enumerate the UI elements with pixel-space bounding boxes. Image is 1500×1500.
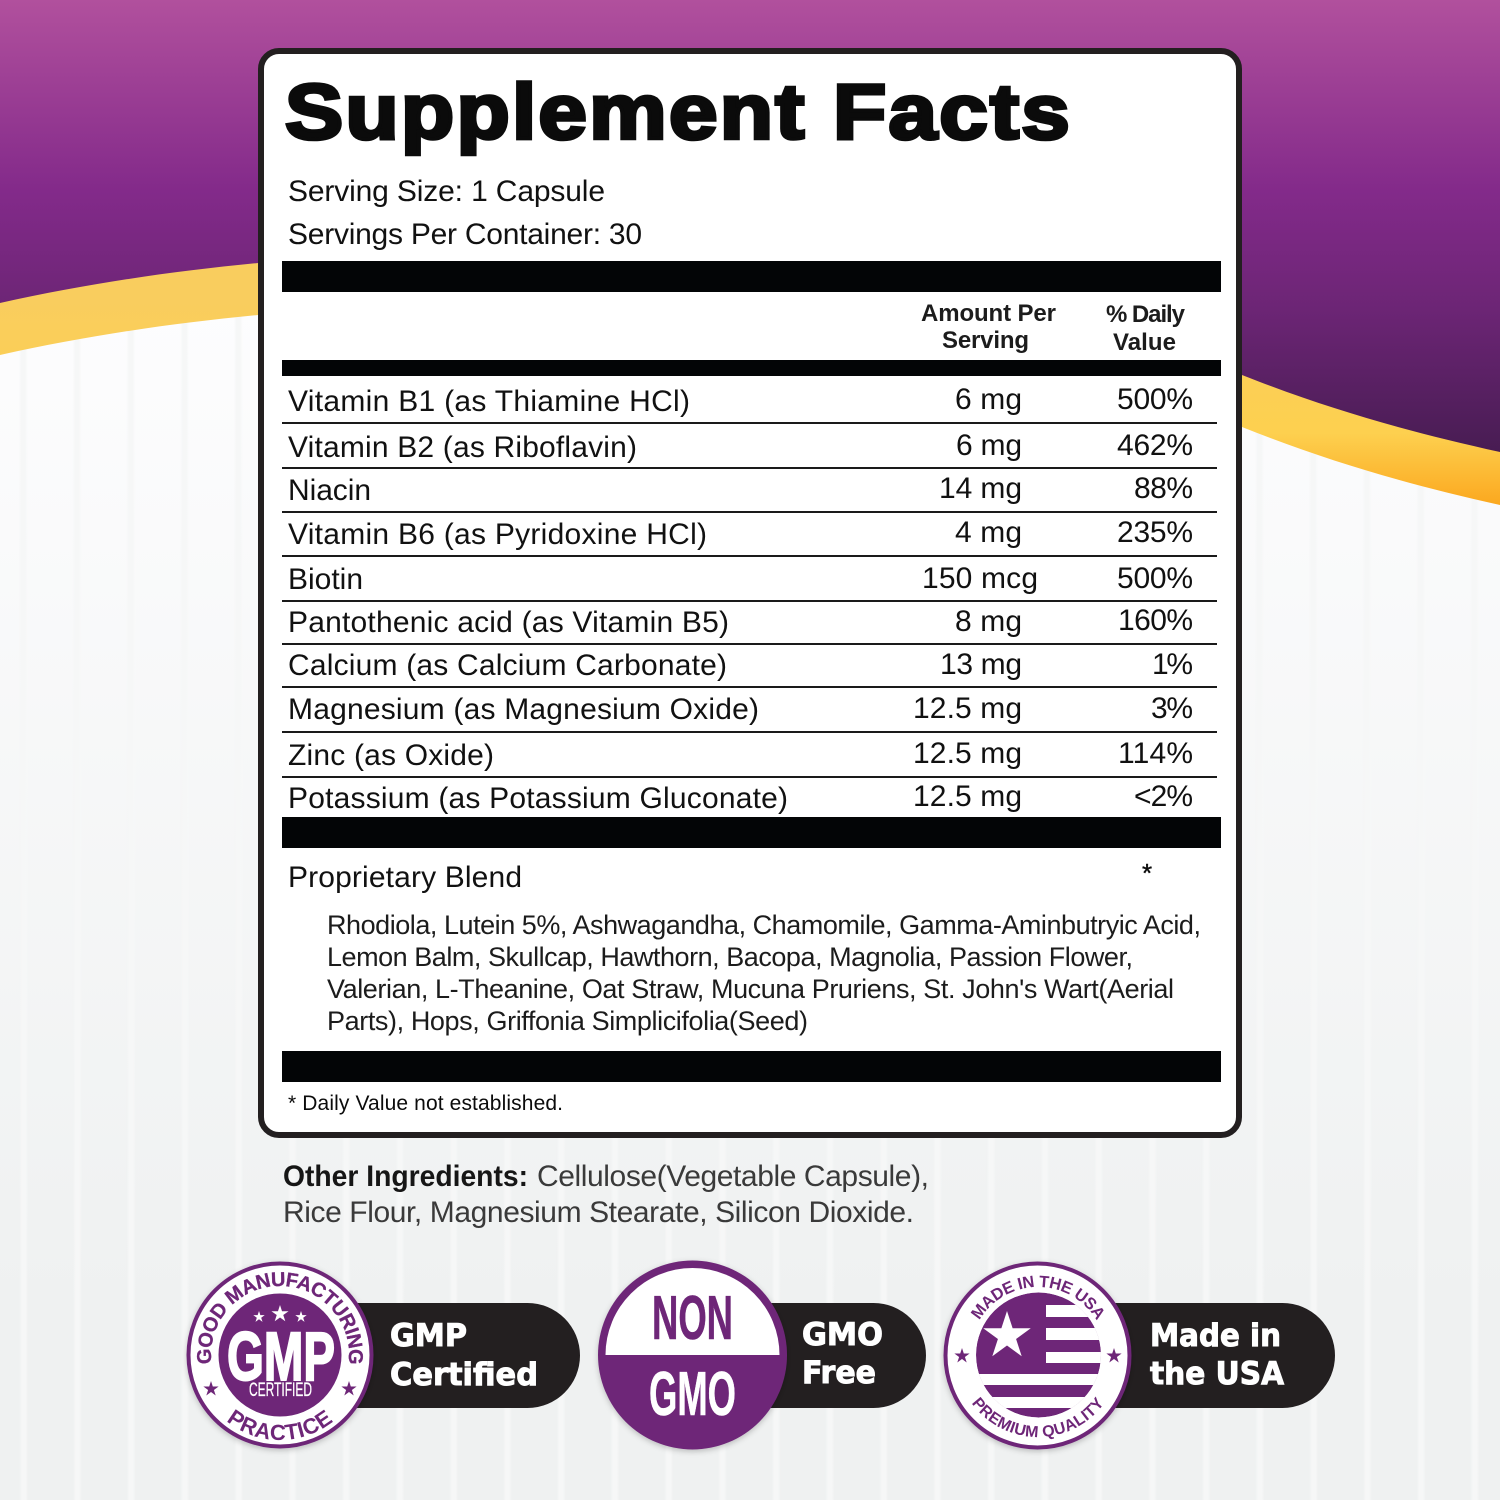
row: potassium: <2% — [1134, 780, 1193, 813]
panel: supplement facts label — [261, 51, 1239, 1135]
row: vitamin b2: Vitamin B2 (as Riboflavin) — [288, 431, 637, 464]
icon: USA seal: PREMIUM QUALITY — [972, 1396, 1102, 1440]
proprietary blend heading — [288, 858, 1152, 894]
title: Supplement Facts — [285, 68, 1072, 156]
row: niacin: 88% — [1134, 472, 1193, 505]
proprietary blend heading: Proprietary Blend — [288, 861, 522, 894]
column header: percent daily value: Value — [1113, 329, 1176, 356]
row: magnesium: 12.5 mg — [913, 692, 1022, 725]
pill: GMO free: GMO — [802, 1317, 883, 1353]
row: pantothenic acid — [288, 604, 1193, 639]
column header: amount per serving: Amount Per — [921, 300, 1056, 327]
row: zinc: Zinc (as Oxide) — [288, 739, 494, 772]
purple header background — [0, 0, 1500, 452]
row: vitamin b1 — [288, 383, 1193, 418]
row: potassium: Potassium (as Potassium Gluconate) — [288, 782, 788, 815]
row: vitamin b6: Vitamin B6 (as Pyridoxine HCl) — [288, 518, 707, 551]
row: magnesium: 3% — [1151, 692, 1193, 725]
row: vitamin b2: 6 mg — [956, 429, 1022, 462]
row: biotin: 150 mcg — [922, 562, 1038, 595]
row: zinc: 12.5 mg — [913, 737, 1022, 770]
badge: GMP certified — [184, 1260, 580, 1454]
row: vitamin b6 — [288, 516, 1193, 551]
row: vitamin b1: 6 mg — [955, 383, 1022, 416]
row: calcium: 13 mg — [940, 648, 1022, 681]
row: pantothenic acid: 8 mg — [955, 605, 1022, 638]
row: magnesium: Magnesium (as Magnesium Oxide) — [288, 693, 759, 726]
nutrient row separators — [282, 422, 1217, 778]
row: vitamin b6: 235% — [1117, 516, 1193, 549]
row: niacin: 14 mg — [939, 472, 1022, 505]
proprietary blend ingredients: Rhodiola, Lutein 5%, Ashwagandha, Chamomile, Gamma-Aminbutryic Acid, — [327, 910, 1201, 940]
column header: amount per serving: Serving — [942, 327, 1029, 354]
pill: GMO free — [700, 1303, 926, 1408]
pill: GMO free: Free — [802, 1355, 876, 1391]
proprietary blend heading: * — [1142, 858, 1152, 888]
icon: GMP seal: GMP — [227, 1318, 335, 1395]
serving information: Serving Size: 1 Capsule — [288, 175, 605, 208]
row: calcium: Calcium (as Calcium Carbonate) — [288, 649, 727, 682]
icon: USA seal: MADE IN THE USA — [970, 1276, 1104, 1320]
proprietary blend ingredients — [327, 910, 1201, 1036]
yellow wave band — [0, 250, 1500, 505]
row: magnesium — [288, 692, 1193, 726]
icon: GMP seal — [184, 1260, 374, 1454]
row: niacin — [288, 472, 1193, 507]
serving information — [288, 175, 642, 251]
serving information: Servings Per Container: 30 — [288, 218, 642, 251]
row: vitamin b1: 500% — [1117, 383, 1193, 416]
row: pantothenic acid: Pantothenic acid (as Vitamin B5) — [288, 606, 729, 639]
row: zinc — [288, 737, 1193, 772]
footnote: * Daily Value not established. — [288, 1092, 563, 1115]
icon: non GMO seal: NON — [652, 1284, 733, 1353]
other ingredients: Cellulose(Vegetable Capsule), — [537, 1160, 929, 1193]
icon: USA seal — [940, 1260, 1132, 1454]
column header: percent daily value — [1106, 301, 1186, 356]
pill: made in the USA: the USA — [1150, 1356, 1284, 1392]
icon: GMP seal: CERTIFIED — [249, 1380, 312, 1401]
nutrient table — [288, 383, 1193, 815]
row: vitamin b6: 4 mg — [955, 516, 1022, 549]
row: potassium: 12.5 mg — [913, 780, 1022, 813]
row: vitamin b2: 462% — [1117, 429, 1193, 462]
pill: GMP certified: GMP — [390, 1318, 467, 1354]
row: vitamin b2 — [288, 429, 1193, 464]
row: pantothenic acid: 160% — [1118, 604, 1193, 637]
row: vitamin b1: Vitamin B1 (as Thiamine HCl) — [288, 385, 690, 418]
other ingredients: Other Ingredients: — [283, 1160, 528, 1193]
badge: made in the USA — [940, 1260, 1335, 1454]
row: biotin — [288, 562, 1193, 596]
pill: made in the USA: Made in — [1150, 1318, 1281, 1354]
row: niacin: Niacin — [288, 474, 371, 507]
pill: GMP certified — [300, 1303, 580, 1408]
black divider bars — [282, 261, 1221, 1082]
badge: GMO free — [598, 1260, 926, 1450]
row: potassium — [288, 780, 1193, 815]
row: calcium: 1% — [1152, 648, 1193, 681]
icon: non GMO seal: GMO — [649, 1360, 736, 1429]
proprietary blend ingredients: Parts), Hops, Griffonia Simplicifolia(Seed) — [327, 1006, 808, 1036]
column header: amount per serving — [921, 300, 1056, 354]
pill: GMP certified: Certified — [390, 1357, 538, 1393]
row: biotin: 500% — [1117, 562, 1193, 595]
row: calcium — [288, 648, 1193, 682]
row: zinc: 114% — [1118, 737, 1193, 770]
row: biotin: Biotin — [288, 563, 363, 596]
proprietary blend ingredients: Lemon Balm, Skullcap, Hawthorn, Bacopa, Magnolia, Passion Flower, — [327, 942, 1133, 972]
pill: made in the USA — [1050, 1303, 1335, 1408]
other ingredients: Rice Flour, Magnesium Stearate, Silicon Dioxide. — [283, 1196, 914, 1229]
icon: non GMO seal — [598, 1260, 787, 1450]
proprietary blend ingredients: Valerian, L-Theanine, Oat Straw, Mucuna Pruriens, St. John's Wart(Aerial — [327, 974, 1174, 1004]
other ingredients — [283, 1160, 929, 1229]
icon: GMP seal: GOOD MANUFACTURING — [196, 1272, 364, 1364]
icon: GMP seal: PRACTICE — [227, 1409, 333, 1440]
column header: percent daily value: % Daily — [1106, 301, 1186, 328]
